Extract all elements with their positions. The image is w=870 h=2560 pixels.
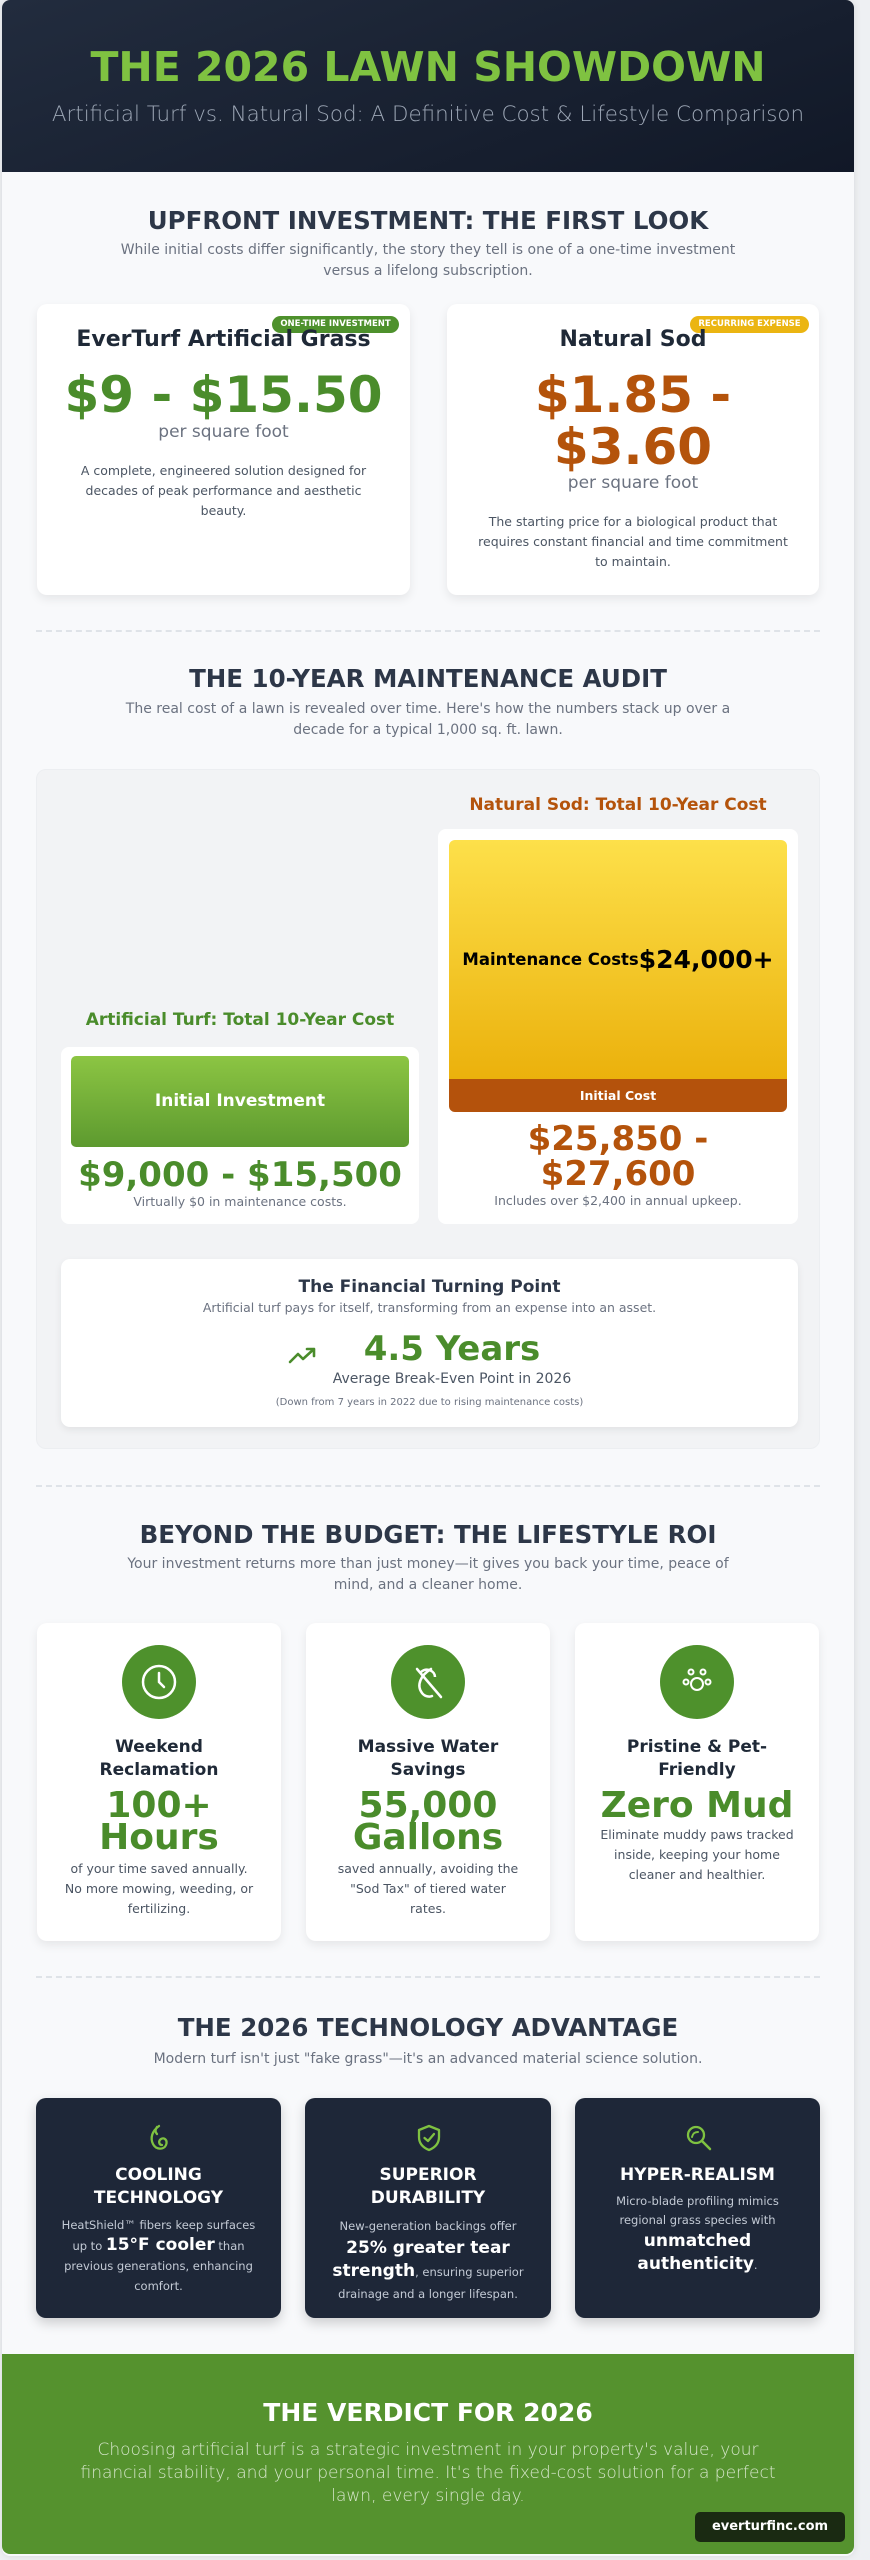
subheading: technology: Modern turf isn't just "fake grass"—it's an advanced material science solution. xyxy=(154,2051,702,2067)
panel: natural sod upfront card xyxy=(447,304,819,595)
badge: recurring expense xyxy=(690,316,809,333)
icon: shield check xyxy=(418,2124,440,2152)
subheading: audit: The real cost of a lawn is revealed over time. Here's how the numbers stack up over a decade for a typical 1,000 sq. ft. lawn. xyxy=(126,701,730,738)
title: HYPER-REALISM xyxy=(620,2165,775,2185)
description: The starting price for a biological product that requires constant financial and time commitment to maintain. xyxy=(478,514,788,569)
subtitle: Artificial Turf vs. Natural Sod: A Definitive Cost & Lifestyle Comparison xyxy=(52,102,804,127)
stat: 55,000 xyxy=(359,1785,497,1826)
bar: maintenance costs xyxy=(449,840,787,1079)
chart: artificial turf bar xyxy=(61,1047,419,1224)
title: COOLING TECHNOLOGY xyxy=(94,2165,223,2208)
verdict title: THE VERDICT FOR 2026 xyxy=(263,2398,593,2427)
chart: natural sod stacked bar xyxy=(438,829,798,1224)
subheading: upfront: While initial costs differ significantly, the story they tell is one of a one-time investment versus a lifelong subscription. xyxy=(121,242,735,279)
panel: cooling technology xyxy=(36,2098,281,2318)
stat xyxy=(99,1785,219,1858)
description: of your time saved annually. No more mowing, weeding, or fertilizing. xyxy=(65,1861,253,1916)
description: Eliminate muddy paws tracked inside, keeping your home cleaner and healthier. xyxy=(600,1827,794,1882)
price xyxy=(535,366,731,476)
panel: water savings xyxy=(306,1623,550,1941)
bar: maintenance costs: $24,000+ xyxy=(639,945,774,974)
heading: lifestyle roi: BEYOND THE BUDGET: THE LIFESTYLE ROI xyxy=(140,1520,716,1549)
caption: turf: Virtually $0 in maintenance costs. xyxy=(133,1194,347,1209)
stat: Hours xyxy=(99,1817,219,1858)
total: sod: $27,600 xyxy=(541,1154,695,1194)
stat xyxy=(353,1785,503,1858)
icon: trending up xyxy=(288,1348,316,1364)
total: turf: $9,000 - $15,500 xyxy=(78,1155,402,1195)
badge: website xyxy=(695,2512,845,2542)
badge: one-time investment: ONE-TIME INVESTMENT xyxy=(280,319,391,329)
stat: 100+ xyxy=(106,1785,212,1826)
unit: per square foot xyxy=(568,473,698,493)
stat: Gallons xyxy=(353,1817,503,1858)
stat: Zero Mud xyxy=(601,1785,793,1826)
icon: no water xyxy=(391,1645,465,1719)
badge: one-time investment xyxy=(272,316,399,333)
title: THE 2026 LAWN SHOWDOWN xyxy=(90,43,766,91)
bar: initial cost: Initial Cost xyxy=(580,1088,656,1103)
subheading: lifestyle: Your investment returns more than just money—it gives you back your time, peace of mind, and a cleaner home. xyxy=(127,1556,729,1593)
panel: 10-year comparison xyxy=(36,769,820,1449)
total: sod xyxy=(528,1119,708,1194)
badge: website: everturfinc.com xyxy=(712,2519,828,2534)
verdict text: Choosing artificial turf is a strategic investment in your property's value, your financial stability, and your personal time. It's the fixed-cost solution for a perfect lawn, every single day. xyxy=(80,2440,776,2506)
callout title: The Financial Turning Point xyxy=(299,1277,560,1297)
stat caption: Average Break-Even Point in 2026 xyxy=(333,1371,571,1387)
description: saved annually, avoiding the "Sod Tax" of tiered water rates. xyxy=(338,1861,518,1916)
unit: per square foot xyxy=(158,422,289,442)
bar: initial investment xyxy=(71,1056,409,1147)
title: Massive Water Savings xyxy=(358,1737,498,1780)
badge: recurring expense: RECURRING EXPENSE xyxy=(698,319,801,329)
callout subtitle: Artificial turf pays for itself, transforming from an expense into an asset. xyxy=(203,1300,656,1315)
card title: EverTurf Artificial Grass xyxy=(76,327,371,352)
bar: initial investment: Initial Investment xyxy=(155,1091,325,1111)
label: natural sod total: Natural Sod: Total 10-Year Cost xyxy=(469,795,767,815)
icon: paw xyxy=(660,1645,734,1719)
price: $3.60 xyxy=(554,418,712,476)
icon: clock xyxy=(122,1645,196,1719)
heading: technology advantage: THE 2026 TECHNOLOGY ADVANTAGE xyxy=(178,2013,678,2042)
panel: superior durability xyxy=(305,2098,551,2318)
title: Pristine & Pet-Friendly xyxy=(627,1737,767,1780)
card title: Natural Sod xyxy=(559,327,707,352)
title: SUPERIOR DURABILITY xyxy=(371,2165,485,2208)
header banner xyxy=(2,0,854,172)
description: Micro-blade profiling mimics regional grass species with unmatched authenticity. xyxy=(616,2194,779,2274)
stat: 4.5 years: 4.5 Years xyxy=(364,1329,540,1369)
bar: initial cost xyxy=(449,1079,787,1112)
heading: upfront investment: UPFRONT INVESTMENT: THE FIRST LOOK xyxy=(148,206,708,235)
bar: maintenance costs: Maintenance Costs xyxy=(462,950,639,969)
panel: hyper-realism xyxy=(575,2098,820,2318)
label: artificial turf total: Artificial Turf: Total 10-Year Cost xyxy=(86,1010,394,1030)
total: sod: $25,850 - xyxy=(528,1119,708,1159)
panel: weekend reclamation xyxy=(37,1623,281,1941)
panel: everturf upfront card xyxy=(37,304,410,595)
title: Weekend Reclamation xyxy=(100,1737,218,1780)
footer: verdict xyxy=(2,2354,854,2554)
price: $1.85 - xyxy=(535,366,731,424)
panel: pet friendly xyxy=(575,1623,819,1941)
footnote: (Down from 7 years in 2022 due to rising maintenance costs) xyxy=(276,1397,583,1408)
icon: magnifier xyxy=(686,2126,712,2150)
heading: maintenance audit: THE 10-YEAR MAINTENANCE AUDIT xyxy=(189,664,667,693)
price: $9 - $15.50 xyxy=(64,366,383,424)
description: A complete, engineered solution designed for decades of peak performance and aesthetic beauty. xyxy=(81,463,366,518)
description: New-generation backings offer 25% greater tear strength, ensuring superior drainage and a longer lifespan. xyxy=(332,2219,524,2301)
callout: financial turning point xyxy=(61,1259,798,1427)
description: HeatShield™ fibers keep surfaces up to 15°F cooler than previous generations, enhancing comfort. xyxy=(62,2218,255,2293)
icon: cooling xyxy=(150,2124,168,2150)
caption: sod: Includes over $2,400 in annual upkeep. xyxy=(494,1193,742,1208)
